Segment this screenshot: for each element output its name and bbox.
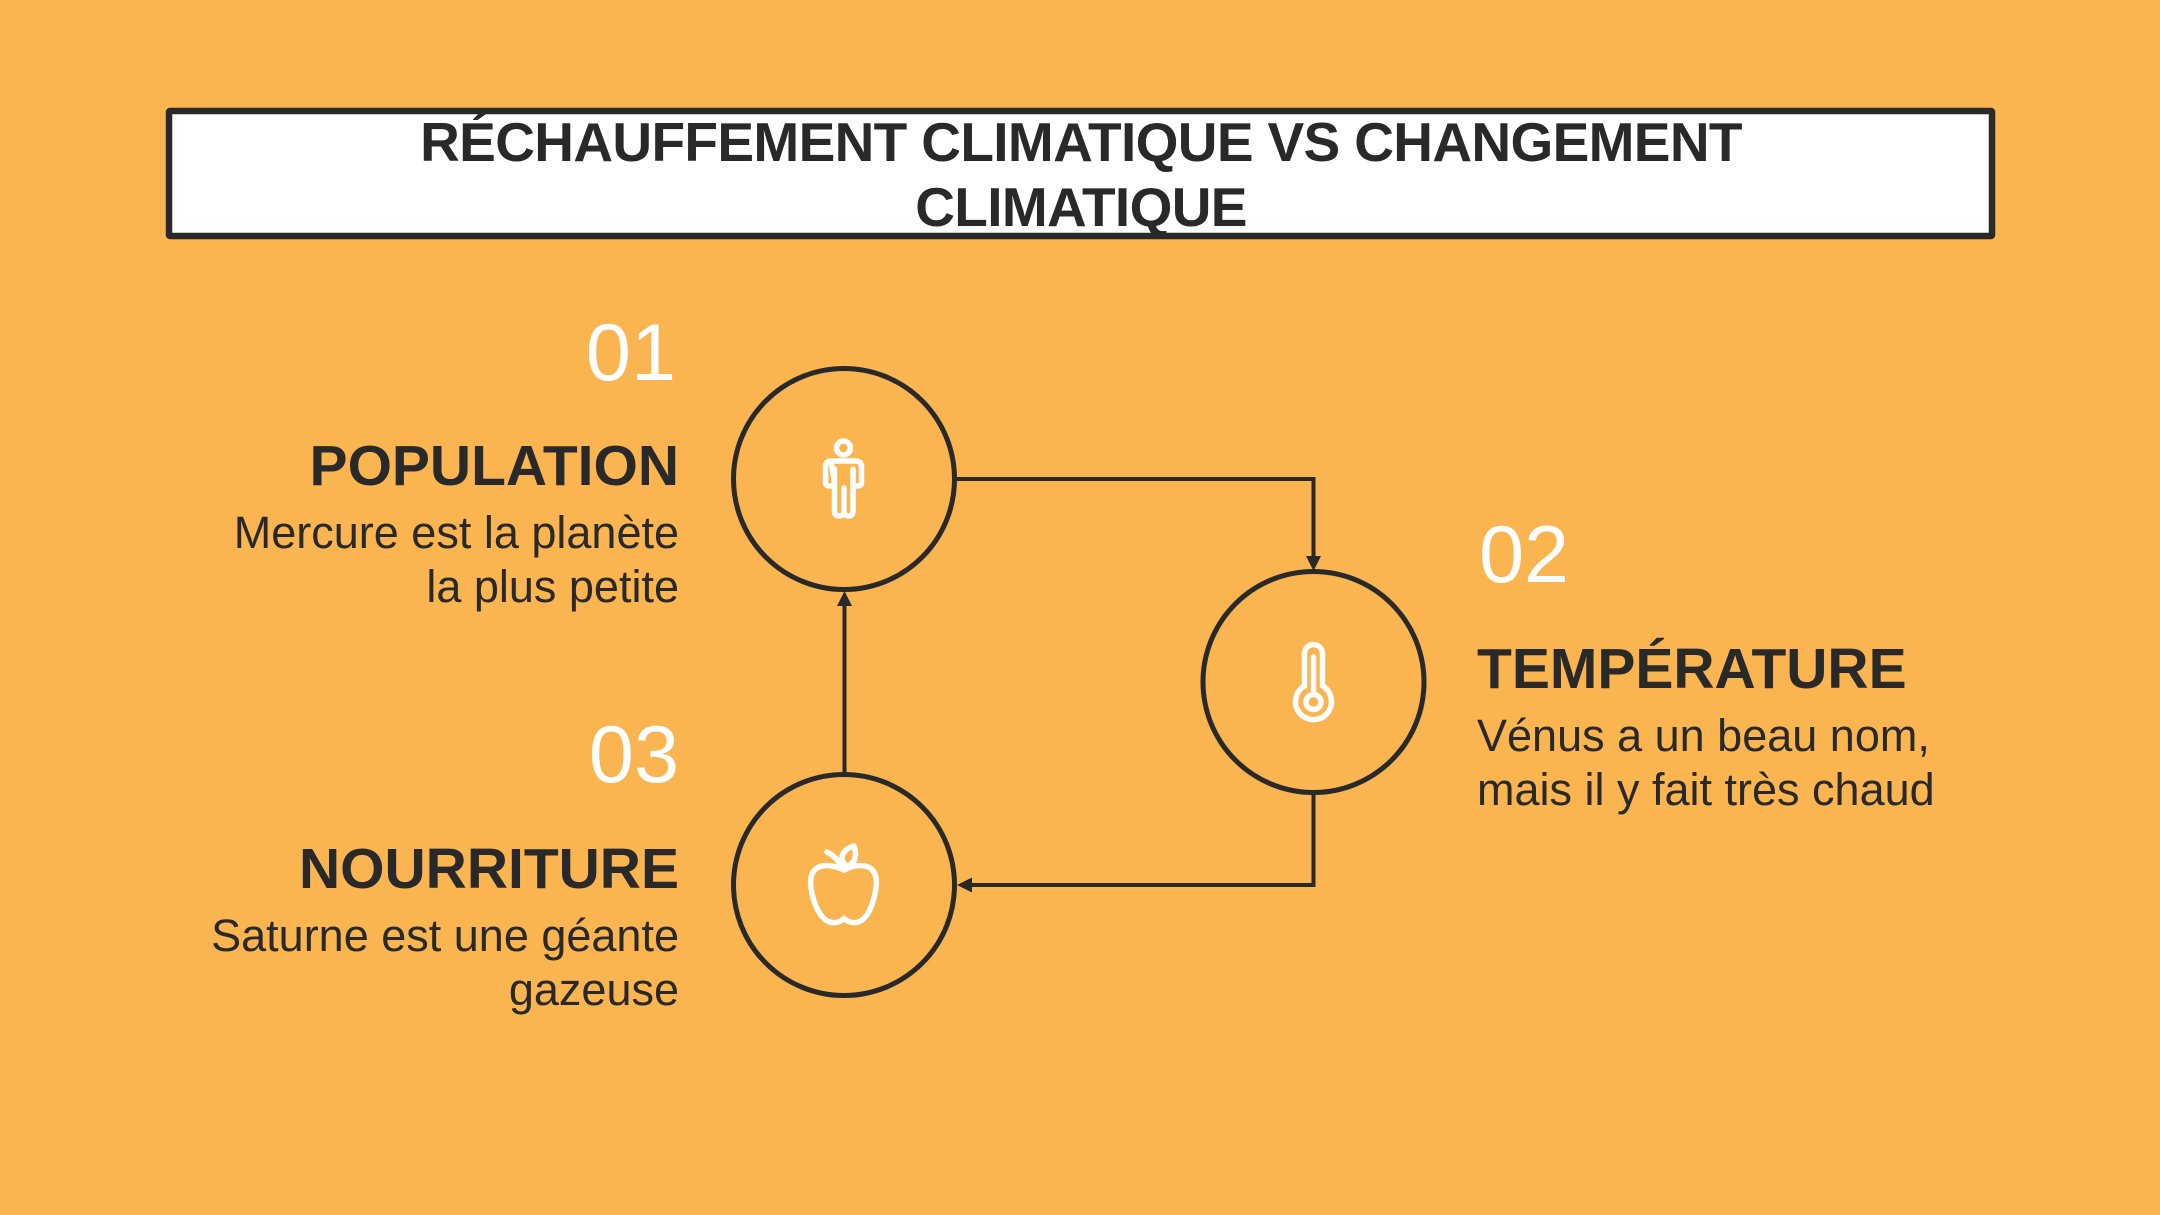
item 03: food: NOURRITURE <box>299 837 679 901</box>
item 02: temperature: TEMPÉRATURE <box>1477 637 1907 701</box>
title banner: RÉCHAUFFEMENT CLIMATIQUE VS CHANGEMENT <box>420 111 1742 173</box>
title banner: CLIMATIQUE <box>915 176 1247 238</box>
item 01: population <box>234 308 679 612</box>
item 03: food: 03 <box>589 710 679 800</box>
arrow: population to temperature <box>957 479 1321 571</box>
item 01: population: 01 <box>586 308 676 398</box>
circle 1: population <box>734 368 954 590</box>
arrow: temperature to food <box>957 795 1314 892</box>
item 02: temperature: Vénus a un beau nom, <box>1477 710 1930 761</box>
item 01: population: Mercure est la planète <box>234 507 679 558</box>
item 02: temperature <box>1477 510 1935 815</box>
icon: person <box>826 441 862 516</box>
arrow: food to population <box>837 591 852 772</box>
icon: thermometer <box>1295 644 1332 720</box>
title banner <box>169 111 1992 238</box>
item 01: population: POPULATION <box>310 434 679 498</box>
icon: apple <box>811 846 876 923</box>
item 03: food: Saturne est une géante <box>211 910 679 961</box>
item 03: food <box>211 710 679 1015</box>
circle 2: temperature <box>1203 572 1424 792</box>
item 02: temperature: 02 <box>1479 510 1569 600</box>
circle 3: food <box>734 774 954 996</box>
item 03: food: gazeuse <box>509 964 679 1015</box>
item 01: population: la plus petite <box>426 561 679 612</box>
item 02: temperature: mais il y fait très chaud <box>1477 764 1935 815</box>
